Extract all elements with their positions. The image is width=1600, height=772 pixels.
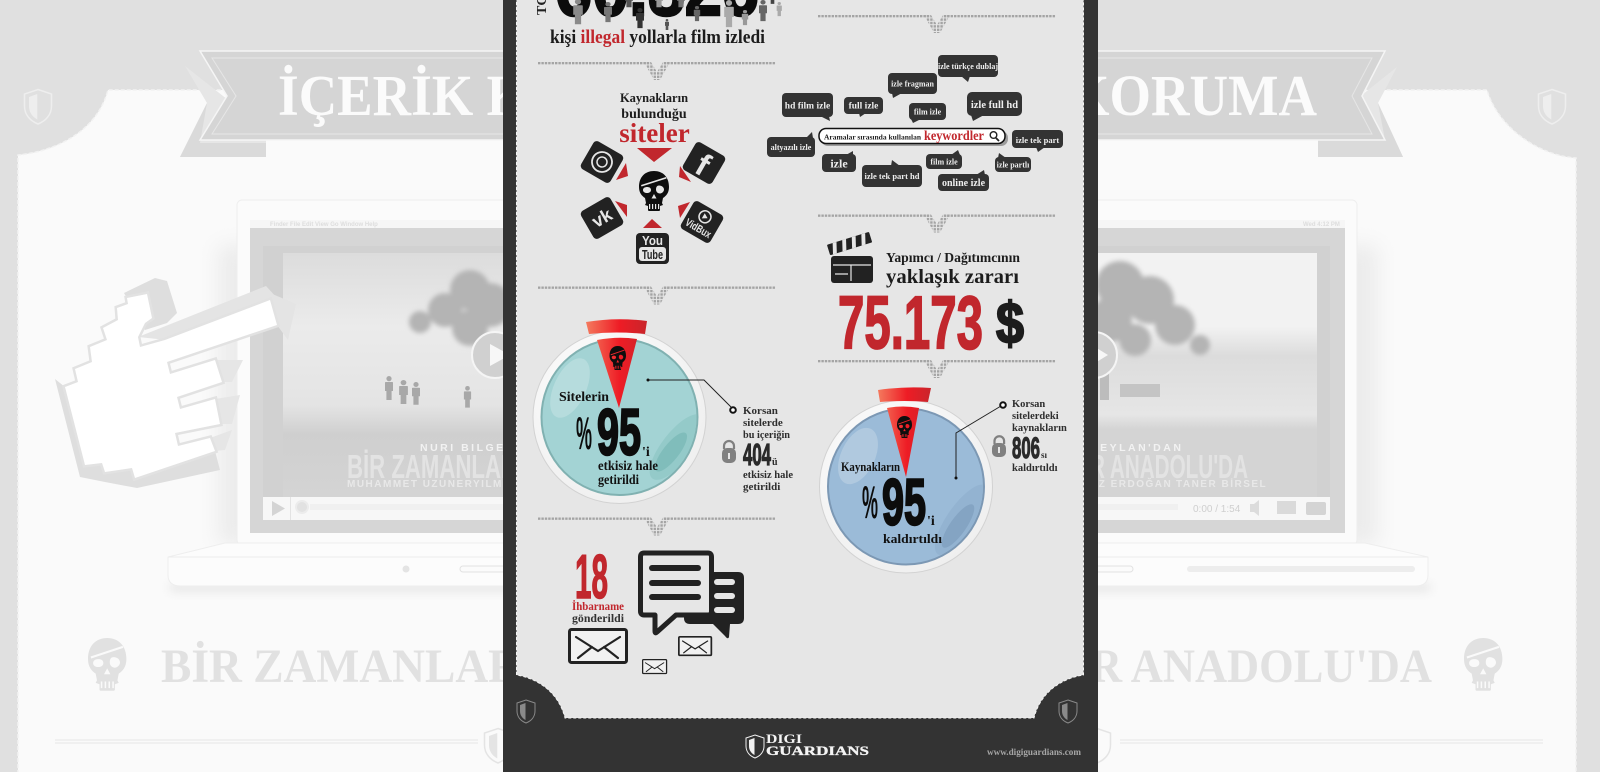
icon: facebook: f [689,146,717,183]
background laptop with movie player: Wed 4:12 PM [1303,222,1340,228]
headline: number of illegal viewers [535,0,782,48]
icon: speech bubbles [640,553,744,638]
gauge text: 'i [927,514,935,529]
section: notices sent: 18 [575,543,608,612]
icon: facebook [679,141,727,189]
background laptop with movie player: Finder File Edit View Go Window Help [270,222,378,228]
heading: Kaynakların [620,91,688,105]
section: notices sent: gönderildi [572,611,625,625]
bubble: izle tek part [1016,135,1059,145]
red pointer [878,387,931,477]
bubble [888,73,937,98]
gauge text: 95 [882,466,926,538]
icon: vidbux: VidBux [683,217,714,241]
bubble: full izle [849,102,878,112]
bubble [938,55,998,82]
icon: vidbux [679,200,725,244]
bubble: online izle [942,178,986,189]
background ribbon title: KORUMA [1068,63,1317,128]
gauge text [559,389,658,487]
search bar: Aramalar sırasında kullanılan [824,132,922,142]
gauge text: etkisiz hale [598,458,658,473]
bubble: izle tek part hd [864,171,920,181]
divider arrow [818,360,1056,378]
caption: kişi illegal yollarla film izledi [550,28,765,48]
bubble: izle partlı [997,160,1030,170]
footer logo [746,731,869,758]
bubble: hd film izle [785,102,830,112]
background laptop with movie player [168,200,1430,591]
callout: 404 links: Korsan [743,405,778,417]
play buttons [472,332,1117,378]
bubble: izle fragman [891,80,934,88]
subheading: yaklaşık zararı [886,266,1019,288]
movie poster text: MUHAMMET UZUNER [347,479,473,490]
player bar [263,497,1330,520]
bubble [822,151,856,172]
footer logo: DIGI [766,731,802,746]
movie poster text [347,442,1267,490]
background movie title left: BİR ZAMANLAR [161,640,522,693]
section: notices sent: İhbarname [572,599,624,613]
gauge text: 95 [597,396,641,468]
callout: 806 sources [1012,399,1067,474]
bubble: izle full hd [971,100,1018,111]
icon: skull [610,346,626,370]
callout: 806 sources: 806 [1012,432,1040,465]
callout: 404 links: sitelerde [743,417,783,429]
gauge text: % [576,407,592,459]
bubble [909,103,946,123]
section: search keywords [767,55,1063,191]
heading: bulunduğu [621,107,687,122]
bubble: altyazılı izle [771,143,812,152]
bubble: izle türkçe dublaj [938,62,998,71]
background skull right [1464,638,1502,691]
bubble [844,97,883,117]
gauge text: Sitelerin [559,389,609,404]
movie poster text: AZ ERDOĞAN [1090,477,1172,490]
search bar [819,128,1008,146]
callout: 404 links: bu içeriğin [743,429,790,441]
footer shield left [517,700,535,723]
background corner shield left [24,90,52,124]
icon: youtube [636,233,669,264]
icon: vk: vk [588,204,617,232]
footer shield right [1059,700,1077,723]
heading: siteler [619,118,690,148]
callout: 404 links [743,405,793,493]
movie poster text: R ANADOLU'DA [1090,448,1248,485]
gauge text: 'i [642,445,650,460]
footer url: www.digiguardians.com [987,748,1081,758]
movie poster text: NURI BILGE C [420,442,521,454]
callout: 404 links: etkisiz hale [743,469,793,481]
tree canopies [409,261,1210,356]
callout: 806 sources: sitelerdeki [1012,411,1059,422]
icon: youtube: You [642,233,663,248]
leader line [954,402,1006,480]
background ribbon title [180,51,1403,157]
crowd of people [573,0,782,30]
icon: skull [897,416,912,438]
leader line [646,378,736,413]
loss figure: 75.173 [838,280,983,364]
bubble [862,160,922,187]
divider arrow [818,214,1056,232]
bubble [938,170,989,191]
callout: 404 links: ü [772,457,778,468]
heading [619,91,690,148]
divider arrow [538,62,776,80]
bubble: film izle [930,158,958,166]
icon: medium envelope [679,637,711,655]
search bar: keywordler [924,128,984,143]
dollar sign: $ [996,291,1024,356]
icon: large envelope [570,630,626,662]
icon: pirate skull [639,171,669,211]
callout: 806 sources: sı [1041,450,1048,460]
icon: clapperboard [827,232,873,283]
callout: 806 sources: kaynakların [1012,423,1067,434]
background footer rules and shields [55,728,1543,763]
icon: small envelope [643,660,667,673]
pixel hand cursor [55,278,296,488]
movie poster text: TANER BİRSEL [1176,477,1267,490]
gauge: sources 95 percent [820,387,1067,573]
background corner shield right [1538,90,1566,124]
bubble [767,132,815,157]
divider arrow [538,286,776,304]
divider arrow [818,15,1056,33]
callout: 404 links: getirildi [743,481,780,493]
red arrows [615,148,691,228]
gauge text: getirildi [598,472,639,487]
callout: 806 sources: Korsan [1012,399,1045,410]
section: source sites [579,91,727,264]
red pointer [586,319,647,408]
callout: 404 links: 404 [743,437,771,472]
background skull left [88,638,126,691]
bubble: film izle [914,108,942,116]
icon: at sign site [579,140,625,184]
gauge: sites 95 percent [533,319,793,504]
background ribbon title: İÇERİK K [278,63,528,128]
icon: vk [579,196,625,240]
heading: Yapımcı / Dağıtımcının [886,251,1020,266]
section: producer loss [827,232,1024,364]
icon: lock [722,441,736,463]
background movie title right: R ANADOLU'DA [1090,640,1432,693]
panel: central dark infographic column [503,0,1098,772]
movie poster text: CEYLAN'DAN [1090,442,1183,454]
callout: 806 sources: kaldırtıldı [1012,463,1058,474]
icon: lock [992,436,1006,457]
gauge text [841,460,942,546]
player bar: 0:00 / 1:54 [1193,504,1241,515]
divider arrow [538,518,776,536]
gauge text: kaldırtıldı [883,531,942,546]
section: notices sent [570,543,744,673]
gauge text: Kaynakların [841,460,900,474]
gauge text: % [862,476,878,528]
bubble: izle [830,156,848,170]
bubble [782,93,833,121]
movie poster text: YILMAZ [473,479,519,490]
bubble [926,150,962,169]
icon: youtube: Tube [642,247,663,262]
footer logo: GUARDIANS [766,743,869,758]
bubble [995,153,1031,172]
bubble [967,92,1022,121]
bubble [1012,130,1063,152]
movie poster text: BİR ZAMANLAR [347,448,517,485]
